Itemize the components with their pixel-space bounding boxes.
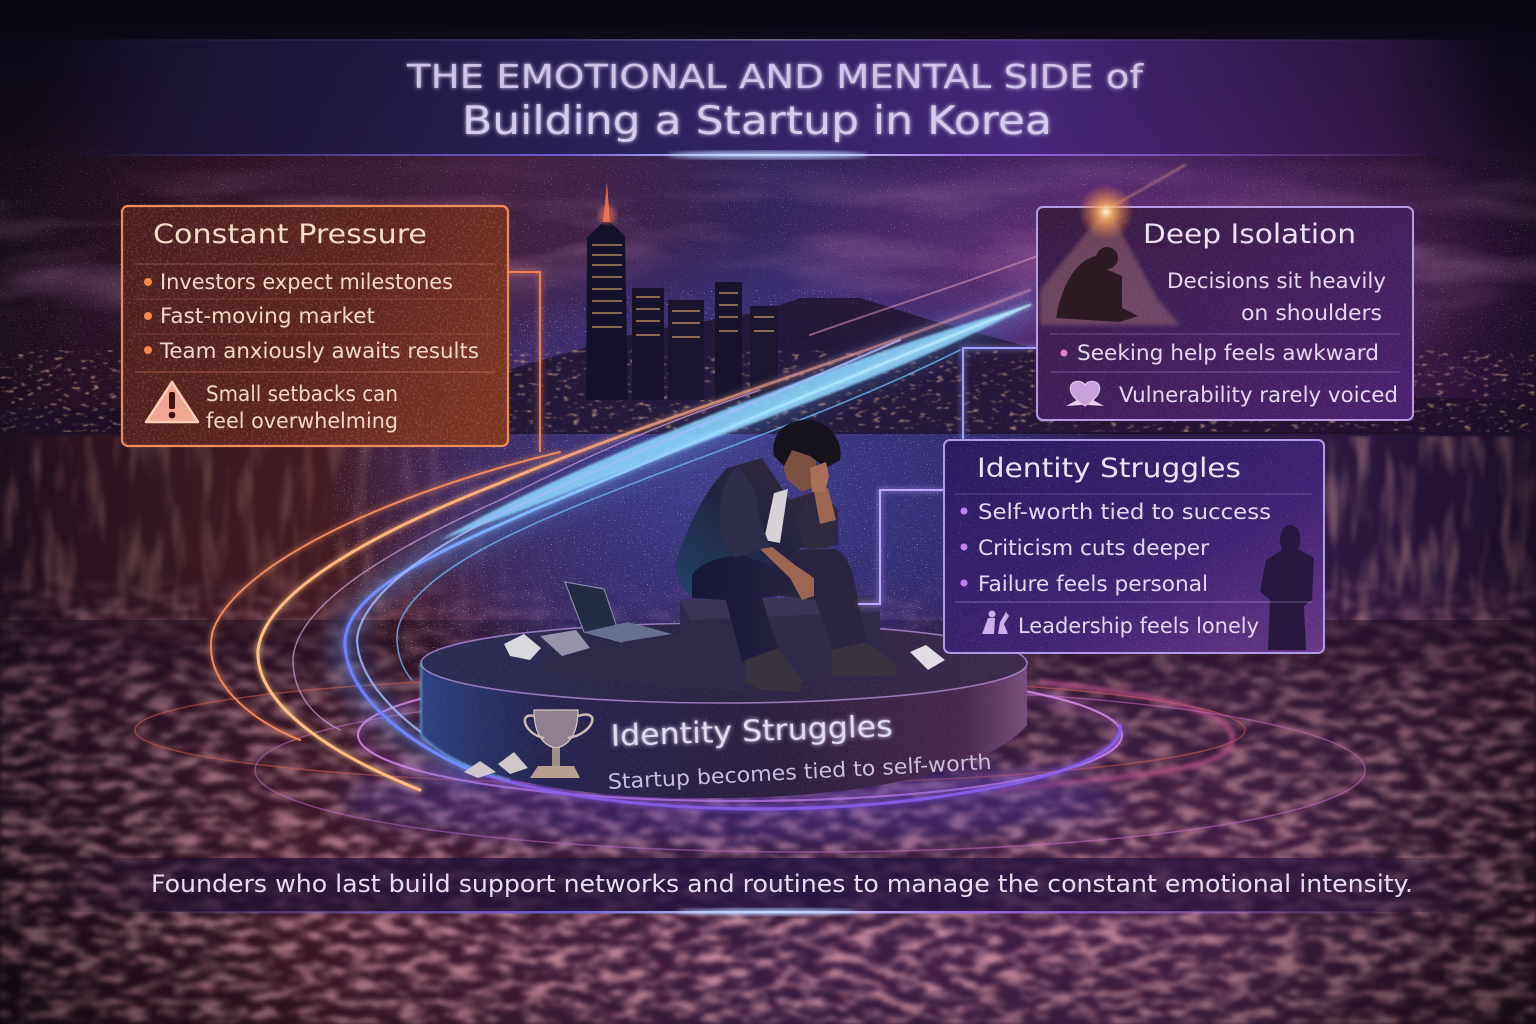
bullet: Leadership feels lonely	[1018, 614, 1259, 638]
bullet list: Fast-moving market	[160, 304, 375, 328]
laptop and papers	[504, 582, 945, 670]
bullet: Seeking help feels awkward	[1077, 341, 1379, 365]
panel: constant pressure	[122, 206, 508, 446]
warning text: feel overwhelming	[206, 409, 398, 433]
title line 2: Building a Startup in Korea	[462, 99, 1052, 144]
icon: warning triangle	[146, 382, 198, 422]
platform pedestal	[421, 596, 1027, 800]
forearm and hand on knee	[760, 547, 814, 600]
swoosh: energy ribbons	[211, 165, 1185, 809]
far leg	[770, 549, 867, 650]
torso and jacket	[675, 458, 838, 598]
panel heading: Identity Struggles	[977, 453, 1241, 484]
bullet list: Team anxiously awaits results	[159, 339, 479, 363]
icon: lamp glow	[1078, 184, 1134, 240]
footer takeaway: Founders who last build support networks and routines to manage the constant emotional intensity.	[151, 870, 1413, 898]
bullet list	[159, 270, 479, 363]
body text: on shoulders	[1241, 301, 1382, 325]
icon: broken trophy	[464, 710, 592, 778]
bullet list: Investors expect milestones	[160, 270, 453, 294]
figure: stressed founder	[675, 420, 898, 692]
bullet list: Self-worth tied to success	[978, 500, 1271, 524]
warning text	[206, 382, 398, 433]
connector lines	[508, 272, 1037, 604]
near shoe	[745, 648, 802, 692]
panel: identity struggles	[944, 440, 1324, 653]
white shirt	[764, 489, 788, 543]
platform heading: Identity Struggles	[610, 709, 893, 753]
panel heading: Constant Pressure	[153, 219, 427, 250]
far shoe	[832, 642, 898, 677]
body text: Decisions sit heavily	[1167, 269, 1386, 293]
panel heading: Deep Isolation	[1143, 219, 1356, 250]
silhouette	[1260, 525, 1314, 650]
icon: heart	[1066, 381, 1104, 406]
warning text: Small setbacks can	[206, 382, 398, 406]
raised forearm	[814, 488, 836, 524]
elbow sleeve	[795, 500, 838, 549]
body text	[1167, 269, 1386, 325]
icon: seated lonely figure	[1056, 247, 1138, 322]
near arm	[719, 466, 770, 558]
bullet: Vulnerability rarely voiced	[1119, 383, 1398, 407]
bullet list: Failure feels personal	[978, 572, 1208, 596]
hair	[773, 420, 841, 468]
bullet list: Criticism cuts deeper	[978, 536, 1209, 560]
title line 1: THE EMOTIONAL AND MENTAL SIDE of	[406, 57, 1145, 96]
raised stone step	[540, 596, 900, 690]
near thigh and leg	[692, 556, 815, 662]
platform subheading: Startup becomes tied to self-worth	[607, 750, 992, 794]
icon: people	[982, 610, 1009, 634]
hand on forehead	[810, 462, 829, 492]
head	[780, 450, 816, 492]
footer band	[30, 858, 1506, 916]
orbit rings around platform	[135, 669, 1365, 852]
panel: deep isolation	[1037, 184, 1413, 420]
city skyline	[0, 182, 1536, 434]
title band	[40, 39, 1496, 159]
bullet list	[978, 500, 1271, 596]
